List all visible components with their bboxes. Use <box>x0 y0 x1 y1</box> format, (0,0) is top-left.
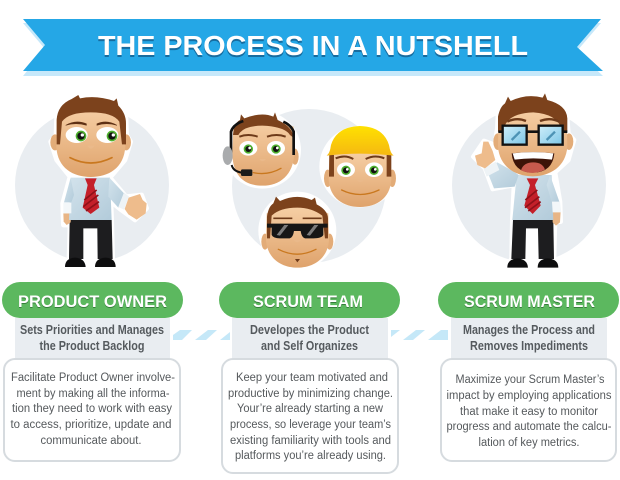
role pill <box>219 282 400 318</box>
hair <box>498 93 567 132</box>
subtitle: Manages the Process and <box>463 323 595 337</box>
role pill <box>438 282 619 318</box>
connector dashes right <box>391 330 448 340</box>
tie <box>524 178 541 214</box>
ears <box>493 133 502 150</box>
eyes <box>66 127 88 143</box>
description <box>446 374 612 449</box>
role subtitle band <box>451 318 607 359</box>
column: scrum master <box>438 282 619 461</box>
description: tion they need to work with easy <box>12 403 172 415</box>
nose <box>87 146 95 149</box>
hair <box>57 95 126 144</box>
shirt <box>487 162 559 220</box>
ears <box>50 134 60 150</box>
description: Maximize your Scrum Master’s <box>456 374 605 386</box>
shoes <box>65 258 86 267</box>
column: product owner <box>2 282 183 461</box>
description: to access, prioritize, update and <box>10 419 172 431</box>
title banner <box>23 19 603 76</box>
role pill <box>2 282 183 318</box>
description: communicate about. <box>40 435 142 447</box>
description: impact by employing applications <box>446 390 612 402</box>
description: Facilitate Product Owner involve- <box>11 372 175 384</box>
tie <box>83 178 99 214</box>
description card <box>4 359 180 461</box>
role subtitle band <box>15 318 170 359</box>
panel: product owner illustration <box>15 95 169 267</box>
description card <box>441 359 616 461</box>
subtitle: Removes Impediments <box>470 339 588 353</box>
description: process, so leverage your team’s <box>230 419 391 431</box>
right-side hand <box>553 212 561 226</box>
description <box>228 372 393 462</box>
description: ment by making all the informa- <box>16 388 170 400</box>
description: progress and automate the calcu- <box>446 421 612 433</box>
hard hat face <box>319 126 401 207</box>
brows <box>507 119 559 122</box>
pants <box>511 220 554 259</box>
column: scrum team <box>219 282 400 473</box>
brows <box>66 122 87 126</box>
right hand <box>125 194 147 220</box>
subtitle: Developes the Product <box>250 323 370 337</box>
description <box>10 372 175 447</box>
role name: SCRUM TEAM <box>253 292 363 311</box>
subtitle <box>463 323 595 353</box>
description: productive by minimizing change. <box>228 388 393 400</box>
face <box>498 108 567 176</box>
raised hand <box>475 142 495 168</box>
description card <box>222 359 398 473</box>
title: THE PROCESS IN A NUTSHELL <box>98 30 528 61</box>
description: that make it easy to monitor <box>460 406 598 418</box>
character outline <box>473 95 574 267</box>
description: Keep your team motivated and <box>236 372 388 384</box>
character outline <box>51 97 147 267</box>
face <box>56 107 125 177</box>
description: platforms you’re already using. <box>235 450 386 462</box>
subtitle: and Self Organizes <box>261 339 358 353</box>
headset face <box>223 111 301 189</box>
shirt <box>64 178 124 220</box>
subtitle: Sets Priorities and Manages <box>20 323 164 337</box>
panel: scrum master illustration <box>452 93 606 268</box>
description: lation of key metrics. <box>478 437 580 449</box>
connector dashes left <box>173 330 230 340</box>
shoes <box>507 258 528 268</box>
role name: SCRUM MASTER <box>464 292 595 311</box>
role name: PRODUCT OWNER <box>18 292 167 311</box>
description: existing familiarity with tools and <box>230 435 391 447</box>
pants <box>69 220 113 259</box>
mouth <box>70 158 112 163</box>
subtitle <box>250 323 370 353</box>
role subtitle band <box>232 318 388 359</box>
sunglasses face <box>258 192 336 270</box>
mouth <box>512 152 554 173</box>
subtitle: the Product Backlog <box>40 339 144 353</box>
description: Your’re already starting a new <box>237 403 384 415</box>
glasses <box>503 126 527 145</box>
left hand <box>63 213 71 225</box>
panel: scrum team illustration <box>223 109 401 270</box>
subtitle <box>20 323 164 353</box>
